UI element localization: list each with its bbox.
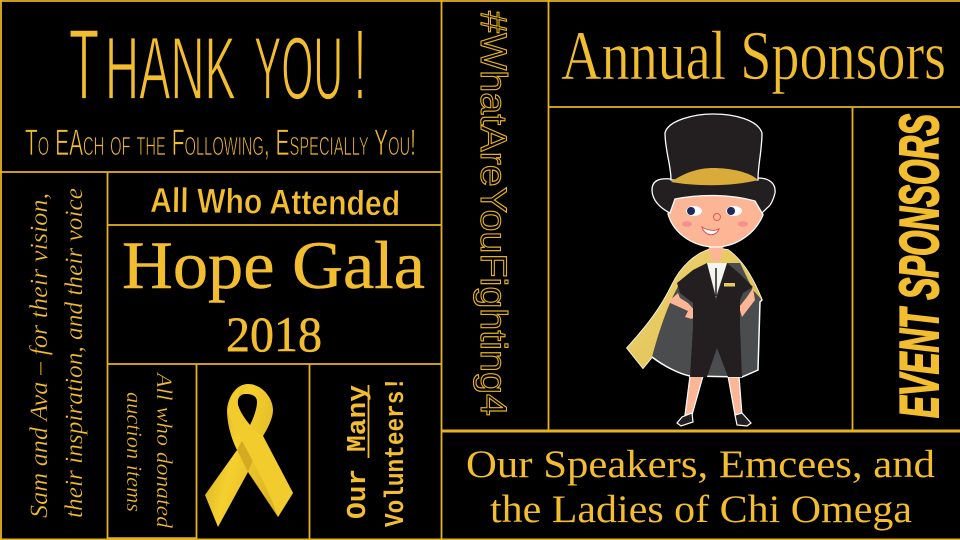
text: Sam and Ava: their inspiration, and their voice xyxy=(61,188,88,518)
heading: Thank you: T xyxy=(69,9,99,121)
text: auction items xyxy=(122,371,177,529)
hat band xyxy=(671,168,758,185)
legs and shoes xyxy=(685,376,742,415)
heading: Thank you: HANK xyxy=(105,18,236,118)
text: ! xyxy=(354,9,366,121)
text: All Who Attended: All Who Attended xyxy=(150,181,400,223)
text: speakers, emcees xyxy=(466,443,936,531)
icon: yellow ribbon xyxy=(205,384,293,527)
subheading: to each of the following: To EAch of the Following, Especially You! xyxy=(25,122,416,163)
heading: Thank you: YOU xyxy=(254,18,343,118)
suit xyxy=(677,263,753,377)
text: Sam and Ava xyxy=(26,188,88,518)
text: our many volunteers: Our Many xyxy=(344,385,374,519)
cape xyxy=(627,248,762,377)
neck xyxy=(708,245,724,262)
hat xyxy=(665,114,762,180)
arms xyxy=(668,288,755,319)
mouth and cheeks xyxy=(702,227,719,235)
text: auction items: auction items xyxy=(122,392,147,512)
text: our many volunteers: Volunteers! xyxy=(382,377,412,527)
title: Hope Gala 2018: 2018 xyxy=(226,306,322,362)
hair and hat brim xyxy=(652,178,775,213)
eyes xyxy=(686,206,702,216)
text: speakers, emcees: the Ladies of Chi Omega xyxy=(490,488,912,531)
hashtag: #WhatAreYouFighting4 xyxy=(473,11,514,416)
text: Sam and Ava: Sam and Ava – for their vision, xyxy=(26,193,53,518)
text: our many volunteers xyxy=(344,377,412,527)
illustration: boy in top hat and cape xyxy=(627,114,775,426)
text: speakers, emcees: Our Speakers, Emcees, and xyxy=(466,443,936,486)
title: Hope Gala 2018 xyxy=(122,227,425,362)
head xyxy=(668,195,763,247)
title: Hope Gala 2018: Hope Gala xyxy=(122,227,425,303)
text: auction items: All who donated xyxy=(152,371,177,529)
